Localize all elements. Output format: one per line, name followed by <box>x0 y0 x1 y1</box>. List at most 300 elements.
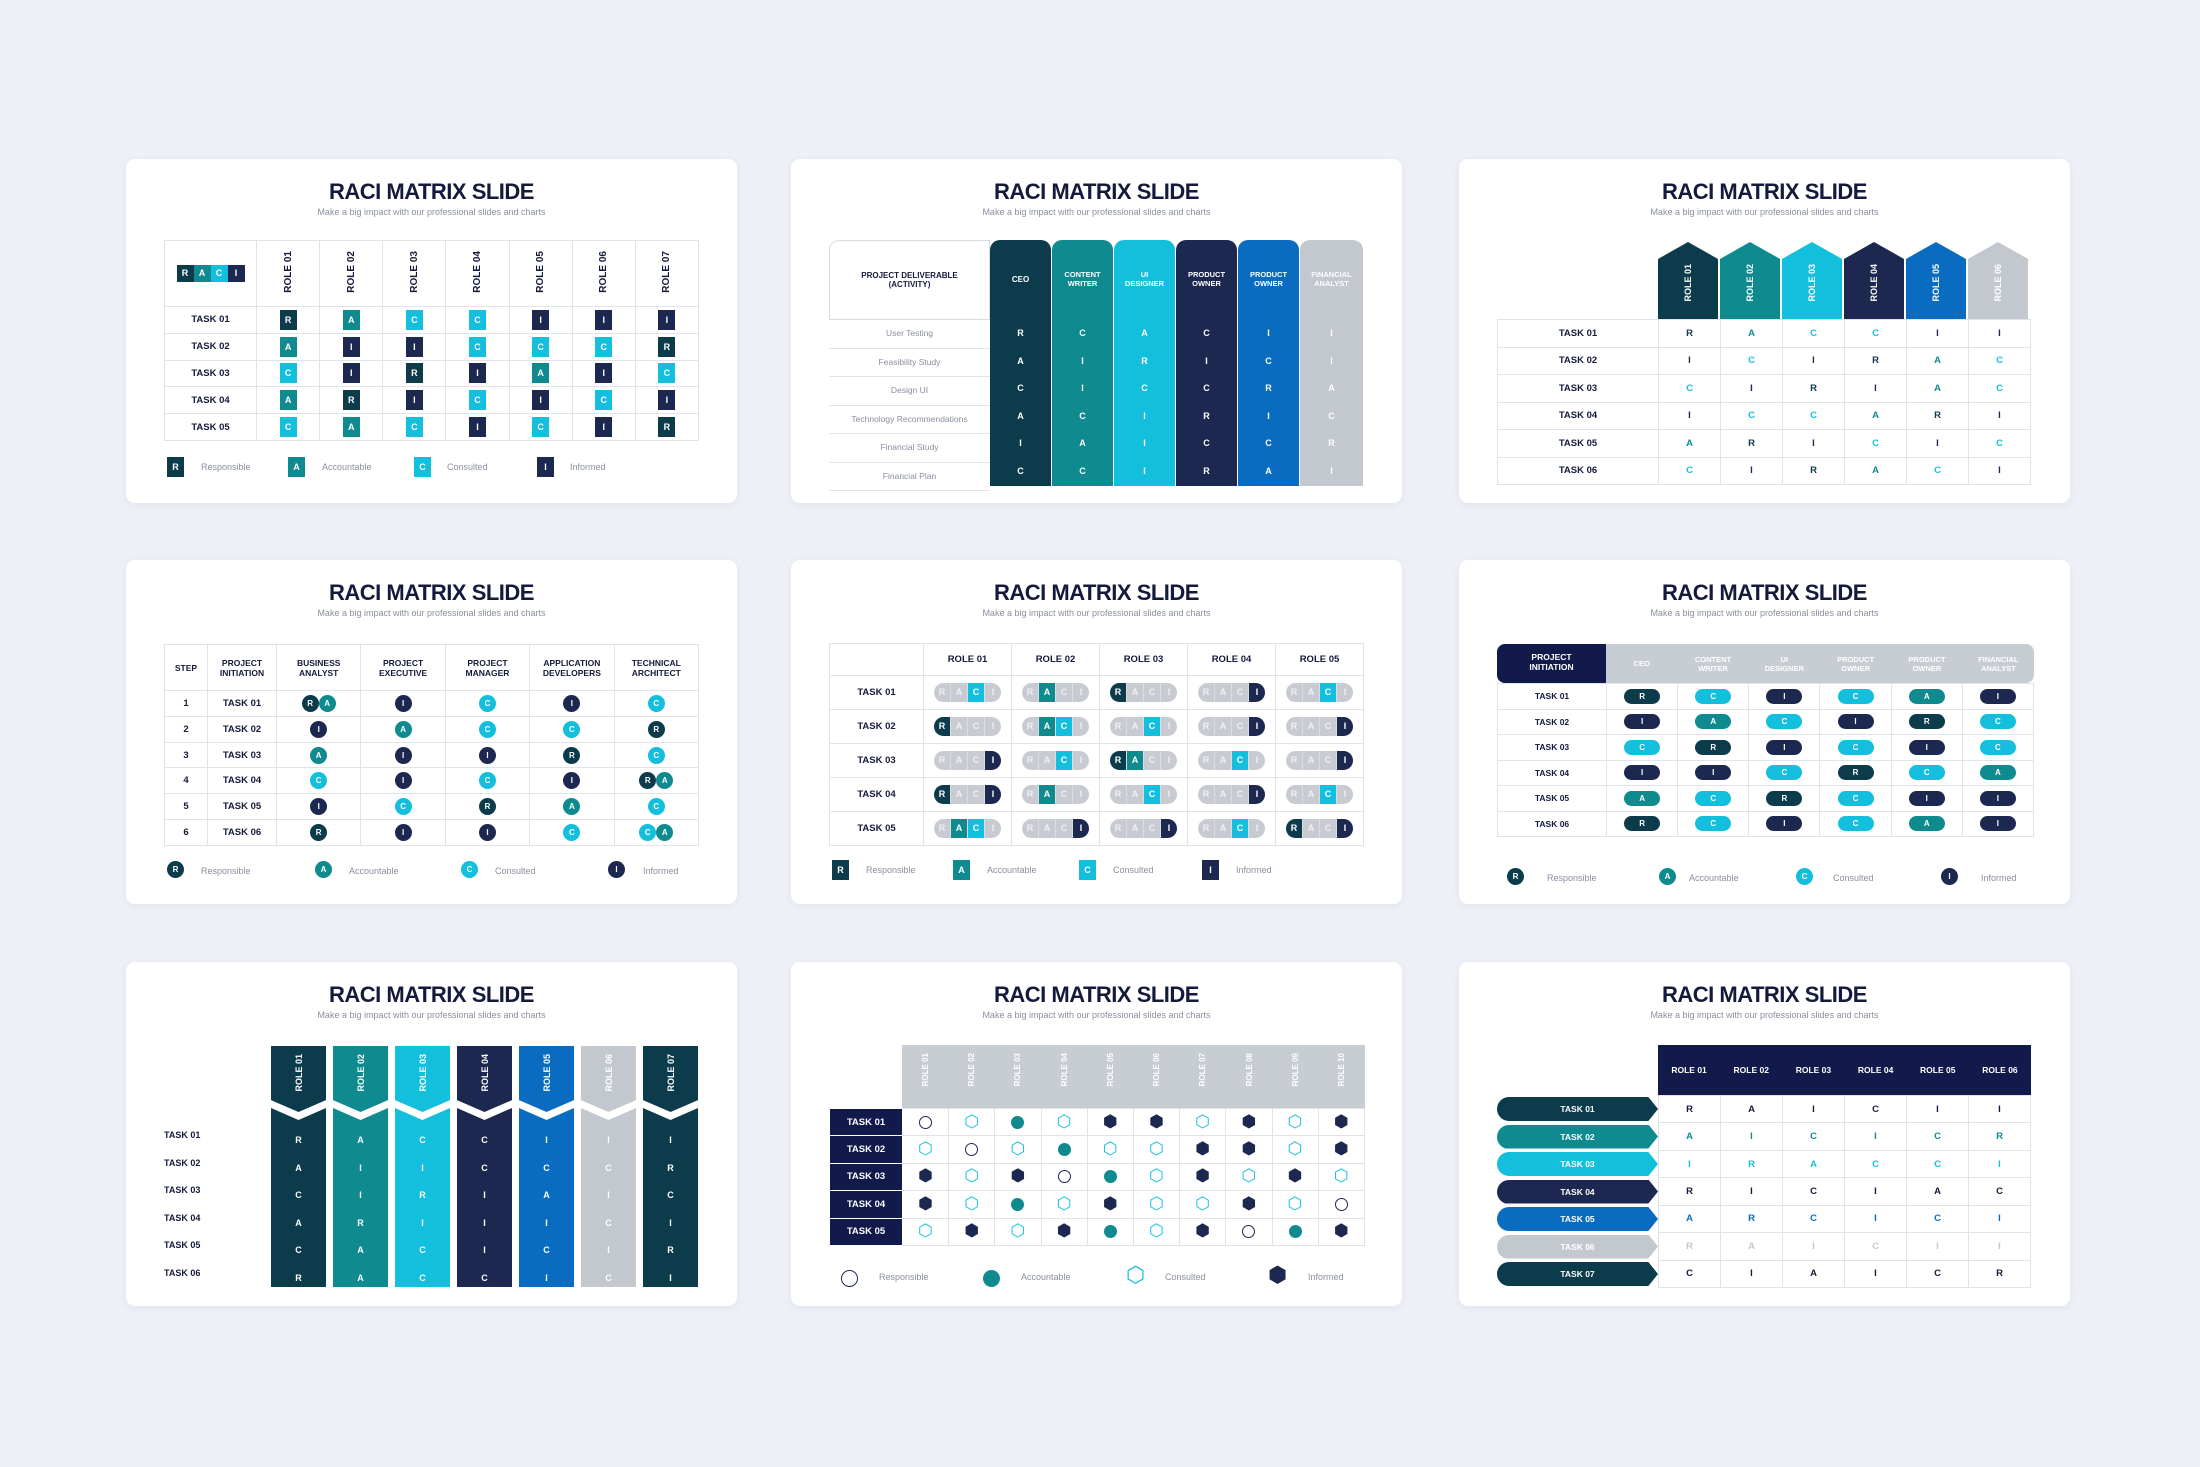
table: steps: 2 <box>183 724 189 735</box>
table: symbols: ⬢ <box>1288 1166 1303 1186</box>
legend: ⬡ <box>1126 1263 1145 1288</box>
table: pills: C <box>1853 743 1858 752</box>
table: pill matrix: A <box>1132 755 1138 765</box>
table: pill matrix: R <box>1291 721 1297 731</box>
role columns: I <box>421 1218 424 1228</box>
table: symbols: ⬢ <box>918 1166 933 1186</box>
legend <box>167 861 679 878</box>
role columns: R <box>295 1135 302 1145</box>
role columns: A <box>357 1245 364 1255</box>
role columns: A <box>1141 328 1148 338</box>
table: task/role matrix: ROLE 04 <box>472 251 483 293</box>
table: pill matrix: I <box>1344 823 1346 833</box>
table: pill matrix: ROLE 05 <box>1300 654 1339 665</box>
table: steps: C <box>653 751 659 760</box>
table: task/role matrix <box>164 240 699 441</box>
table: pill matrix: A <box>1220 721 1226 731</box>
legend: C <box>1084 865 1091 875</box>
role columns: C <box>1079 328 1086 338</box>
table: pill matrix: I <box>1256 687 1258 697</box>
table: symbols: ⬢ <box>1334 1112 1349 1132</box>
table: tasks: TASK 02 <box>1559 355 1597 366</box>
header bar: INITIATION <box>1529 662 1574 672</box>
legend: Responsible <box>201 866 251 876</box>
role columns: C <box>1017 383 1024 393</box>
task labels: TASK 05 <box>164 1240 200 1250</box>
table: steps: I <box>486 751 489 760</box>
role columns: R <box>1328 438 1335 448</box>
table: symbols: ⬢ <box>1103 1112 1118 1132</box>
table: letters: R <box>1686 1104 1693 1115</box>
header bar: OWNER <box>1841 664 1870 672</box>
header bar: ROLE 02 <box>1734 1065 1769 1075</box>
table: tasks: C <box>1996 355 2003 366</box>
table: tasks: A <box>1748 328 1755 339</box>
table: letters: I <box>1998 1159 2001 1170</box>
card 7: chevron columns <box>126 962 737 1306</box>
table: letters: A <box>1810 1268 1817 1279</box>
legend <box>167 457 606 477</box>
table: pill matrix: I <box>1256 789 1258 799</box>
header strip: ROLE 03 <box>1013 1053 1022 1086</box>
table: pill matrix: A <box>1220 789 1226 799</box>
table: pills: C <box>1710 692 1716 701</box>
table: letters: C <box>1934 1268 1941 1279</box>
header strip: ROLE 05 <box>1106 1053 1115 1086</box>
header strip: ROLE 06 <box>1152 1053 1161 1086</box>
table: steps: TASK 04 <box>223 775 261 786</box>
table: pill matrix: C <box>1237 721 1243 731</box>
table: pill matrix: I <box>992 721 994 731</box>
role columns: ROLE 05 <box>542 1054 552 1092</box>
table: pill matrix: C <box>1237 687 1243 697</box>
table: letters: C <box>1872 1159 1879 1170</box>
table: symbols: ⬡ <box>1288 1194 1303 1214</box>
table: letters: I <box>1874 1268 1877 1279</box>
table: symbols: ⬡ <box>1057 1112 1072 1132</box>
legend: Accountable <box>349 866 399 876</box>
table: tasks: R <box>1748 438 1755 449</box>
subtitle: Make a big impact with our professional slides and charts <box>1650 207 1879 217</box>
table: task/role matrix: A <box>199 268 205 278</box>
table: steps: 6 <box>183 827 189 838</box>
table: task/role matrix: R <box>664 422 670 432</box>
role columns: A <box>357 1272 364 1282</box>
table: pill matrix: I <box>1080 721 1082 731</box>
table: task/role matrix: C <box>474 395 481 405</box>
table: task/role matrix: C <box>537 422 544 432</box>
table: pill matrix: TASK 02 <box>857 721 896 732</box>
legend: Accountable <box>987 865 1037 875</box>
role columns: WRITER <box>1068 279 1097 288</box>
table: pill matrix: A <box>1132 823 1138 833</box>
table: pills: TASK 06 <box>1535 819 1569 829</box>
card 8: symbol matrix <box>791 962 1402 1306</box>
table: steps: TASK 01 <box>223 698 261 709</box>
table: letters: R <box>1686 1241 1693 1252</box>
table: pill matrix: C <box>1237 755 1243 765</box>
table: task/role matrix: ROLE 05 <box>535 251 546 293</box>
role columns: C <box>1203 328 1210 338</box>
table: pill matrix: I <box>1168 721 1170 731</box>
legend: A <box>321 865 326 874</box>
table: tasks: I <box>1812 438 1815 449</box>
table: symbols: TASK 03 <box>847 1171 885 1182</box>
role columns: FINANCIAL <box>1311 270 1352 279</box>
table: pill matrix: A <box>1132 789 1138 799</box>
table: pill matrix: C <box>1061 755 1067 765</box>
header strip: ROLE 09 <box>1291 1053 1300 1086</box>
role columns: R <box>295 1272 302 1282</box>
table: letters: C <box>1934 1213 1941 1224</box>
subtitle: Make a big impact with our professional slides and charts <box>982 1010 1211 1020</box>
table: tasks: I <box>1812 355 1815 366</box>
table: pill matrix: A <box>1220 755 1226 765</box>
table: steps: 3 <box>183 750 189 761</box>
legend <box>832 860 1272 880</box>
table: steps: C <box>569 725 575 734</box>
table: symbols: ⬡ <box>1103 1139 1118 1159</box>
table: tasks: R <box>1872 355 1879 366</box>
role columns: I <box>669 1135 672 1145</box>
task arrows: TASK 02 <box>1560 1132 1595 1142</box>
table: pill matrix: C <box>1061 721 1067 731</box>
table: steps: MANAGER <box>466 668 509 678</box>
table: pill matrix: I <box>1080 755 1082 765</box>
table: steps: C <box>316 776 322 785</box>
table: pill matrix: I <box>1080 789 1082 799</box>
table: pills: A <box>1995 768 2001 777</box>
table: steps: 1 <box>183 698 189 709</box>
table: symbols: ⬢ <box>1011 1166 1025 1186</box>
table: letters: I <box>1874 1186 1877 1197</box>
role columns: ROLE 06 <box>604 1054 614 1092</box>
table: pill matrix: R <box>1027 687 1033 697</box>
table: letters: C <box>1934 1159 1941 1170</box>
table: pill matrix: I <box>1256 721 1258 731</box>
table: steps <box>164 644 699 846</box>
table: letters: C <box>1686 1268 1693 1279</box>
legend: Consulted <box>1113 865 1154 875</box>
role columns: I <box>545 1135 548 1145</box>
legend: C <box>419 462 426 472</box>
table: pill matrix: C <box>973 789 979 799</box>
table: letters: R <box>1996 1268 2003 1279</box>
table: task/role matrix: C <box>216 268 222 278</box>
role columns: A <box>1328 383 1335 393</box>
role columns: I <box>1143 466 1146 476</box>
table: tasks: R <box>1934 410 1941 421</box>
table: task/role matrix: R <box>348 395 354 405</box>
role columns: C <box>481 1135 488 1145</box>
table: letters: A <box>1748 1104 1755 1115</box>
table: steps: R <box>307 699 313 708</box>
table: letters: I <box>1688 1159 1691 1170</box>
table: symbols: TASK 01 <box>847 1117 885 1128</box>
table: task/role matrix: A <box>348 315 354 325</box>
role columns: A <box>1017 356 1024 366</box>
role columns: R <box>667 1245 674 1255</box>
table: task/role matrix: I <box>476 422 479 432</box>
role columns: R <box>1017 328 1024 338</box>
table: symbols: TASK 05 <box>847 1226 885 1237</box>
role columns: C <box>605 1218 612 1228</box>
table: steps: C <box>569 828 575 837</box>
header strip <box>902 1045 1365 1108</box>
task arrows: TASK 06 <box>1560 1242 1595 1252</box>
subtitle: Make a big impact with our professional slides and charts <box>317 608 546 618</box>
role headers: ROLE 04 <box>1869 264 1879 302</box>
table: letters: I <box>1874 1213 1877 1224</box>
legend: Consulted <box>1833 873 1874 883</box>
table: letters: C <box>1872 1104 1879 1115</box>
table: pills: R <box>1853 768 1858 777</box>
table: pill matrix: R <box>1291 687 1297 697</box>
table: pills: TASK 03 <box>1535 742 1569 752</box>
title: RACI MATRIX SLIDE <box>1662 982 1867 1007</box>
table: symbols: ⬢ <box>1241 1194 1256 1214</box>
table: pill matrix: R <box>939 687 945 697</box>
title: RACI MATRIX SLIDE <box>1662 580 1867 605</box>
table: letters: I <box>1998 1213 2001 1224</box>
table: task/role matrix: C <box>285 422 291 432</box>
table: letters: C <box>1810 1131 1817 1142</box>
table: pill matrix: C <box>1061 687 1067 697</box>
subtitle: Make a big impact with our professional slides and charts <box>317 207 546 217</box>
legend: Consulted <box>495 866 536 876</box>
table: pills: C <box>1710 794 1716 803</box>
table: pill matrix: A <box>1044 721 1050 731</box>
table: tasks: A <box>1686 438 1693 449</box>
table: pills <box>1497 683 2034 837</box>
table: pill matrix: R <box>939 721 945 731</box>
table: letters: C <box>1934 1131 1941 1142</box>
legend: I <box>1948 872 1951 881</box>
table: pill matrix: R <box>1203 721 1209 731</box>
role columns: R <box>357 1218 364 1228</box>
role headers: ROLE 05 <box>1931 264 1941 302</box>
table: letters: I <box>1874 1131 1877 1142</box>
role columns: C <box>481 1162 488 1172</box>
role columns: ROLE 04 <box>480 1054 490 1092</box>
table: pill matrix: R <box>939 789 945 799</box>
table: letters <box>1658 1095 2031 1288</box>
legend: R <box>172 462 179 472</box>
table: tasks: A <box>1872 465 1879 476</box>
table: symbols: ⬢ <box>918 1194 933 1214</box>
table: symbols: ⬡ <box>1149 1139 1164 1159</box>
table: pill matrix: R <box>939 755 945 765</box>
role columns: I <box>483 1218 486 1228</box>
table: pills: I <box>1641 768 1643 777</box>
table: tasks: I <box>1998 328 2001 339</box>
table: task/role matrix: C <box>601 395 607 405</box>
table: steps: PROJECT <box>222 658 262 668</box>
task labels <box>164 1130 200 1278</box>
legend: C <box>1802 872 1807 881</box>
header bar: CEO <box>1634 659 1650 668</box>
legend: Consulted <box>1165 1272 1206 1282</box>
header bar <box>1497 644 2034 683</box>
role columns: A <box>1017 410 1024 420</box>
table: steps: R <box>653 725 659 734</box>
table: task/role matrix: C <box>537 342 544 352</box>
role columns: C <box>481 1272 488 1282</box>
table: symbols: ⬢ <box>1057 1221 1072 1241</box>
table: letters: I <box>1750 1268 1753 1279</box>
table: pill matrix: A <box>1308 721 1314 731</box>
header strip: ROLE 08 <box>1245 1053 1254 1086</box>
task labels: TASK 06 <box>164 1268 200 1278</box>
role columns: I <box>483 1190 486 1200</box>
table: task/role matrix: A <box>348 422 354 432</box>
role columns: PRODUCT <box>1188 270 1225 279</box>
table: task/role matrix: R <box>285 315 291 325</box>
table: steps: DEVELOPERS <box>543 668 601 678</box>
table: tasks: C <box>1996 438 2003 449</box>
legend: A <box>1665 872 1670 881</box>
table: pills: I <box>1854 717 1857 726</box>
table: symbols: ⬡ <box>964 1194 979 1214</box>
table: tasks: C <box>1872 438 1879 449</box>
role columns: R <box>1141 356 1148 366</box>
table: letters: I <box>1998 1241 2001 1252</box>
table: steps: R <box>645 776 651 785</box>
table: tasks: TASK 03 <box>1559 383 1597 394</box>
table: symbols: ⬢ <box>1103 1194 1118 1214</box>
role columns: I <box>607 1190 610 1200</box>
table: steps: C <box>653 699 659 708</box>
table: pill matrix: C <box>1061 823 1067 833</box>
legend: ⬢ <box>1268 1263 1287 1288</box>
table: pill matrix: I <box>1344 755 1346 765</box>
role columns <box>271 1046 698 1287</box>
table: symbols: ⬢ <box>964 1221 979 1241</box>
role columns: I <box>1205 356 1208 366</box>
role columns: C <box>1141 383 1148 393</box>
table: task/role matrix: I <box>666 315 668 325</box>
subtitle: Make a big impact with our professional slides and charts <box>317 1010 546 1020</box>
table: pill matrix: TASK 05 <box>857 823 896 834</box>
header strip: ROLE 02 <box>967 1053 976 1086</box>
role columns: C <box>1265 356 1272 366</box>
table: steps: I <box>402 751 404 760</box>
deliverable column: Financial Study <box>880 442 939 452</box>
role headers: ROLE 02 <box>1745 264 1755 302</box>
table: pills: C <box>1853 692 1858 701</box>
table: letters: I <box>1750 1131 1753 1142</box>
role columns: I <box>607 1135 610 1145</box>
role columns: C <box>1079 466 1086 476</box>
table: pill matrix: TASK 03 <box>857 755 896 766</box>
table: pill matrix: C <box>1061 789 1067 799</box>
table: task/role matrix: I <box>476 368 479 378</box>
table: pill matrix: R <box>1027 755 1033 765</box>
table: symbols: ⬡ <box>1334 1166 1349 1186</box>
table: letters: A <box>1810 1159 1817 1170</box>
table: pills: I <box>1783 692 1786 701</box>
task arrows <box>1497 1097 1658 1286</box>
table: tasks: C <box>1748 410 1755 421</box>
table: letters: I <box>1812 1104 1815 1115</box>
table: pill matrix: A <box>1308 823 1314 833</box>
table: tasks: C <box>1934 465 1941 476</box>
role columns: A <box>543 1190 550 1200</box>
table: tasks: TASK 01 <box>1559 328 1597 339</box>
table: pills: R <box>1924 717 1930 726</box>
table: task/role matrix: C <box>285 368 291 378</box>
table: steps: C <box>645 828 651 837</box>
legend: A <box>293 462 300 472</box>
table: task/role matrix: ROLE 07 <box>661 251 672 293</box>
role columns: ROLE 02 <box>356 1054 366 1092</box>
table: steps: A <box>569 802 575 811</box>
table: symbols: ⬡ <box>1288 1112 1303 1132</box>
table: tasks: TASK 04 <box>1559 410 1597 421</box>
table: pill matrix: A <box>1308 789 1314 799</box>
table: pill matrix: A <box>1308 687 1314 697</box>
table: task/role matrix: ROLE 02 <box>346 251 357 293</box>
table: task/role matrix: A <box>537 368 544 378</box>
table: steps: I <box>486 828 489 837</box>
table: tasks: TASK 06 <box>1559 465 1597 476</box>
header bar: ROLE 01 <box>1671 1065 1707 1075</box>
table: pill matrix: C <box>973 687 979 697</box>
table: task/role matrix: I <box>602 422 605 432</box>
subtitle: Make a big impact with our professional slides and charts <box>982 608 1211 618</box>
table: pill matrix: R <box>1115 755 1121 765</box>
table: pill matrix: A <box>1044 687 1050 697</box>
deliverable column: User Testing <box>886 328 933 338</box>
table: steps: I <box>402 699 404 708</box>
table: tasks: A <box>1934 355 1941 366</box>
table: pill matrix: A <box>956 789 962 799</box>
table: pill matrix: I <box>1168 789 1170 799</box>
table: pill matrix: C <box>973 755 979 765</box>
table: pills: I <box>1997 692 1999 701</box>
table: task/role matrix: C <box>411 422 418 432</box>
role columns: I <box>545 1272 548 1282</box>
table: steps: A <box>324 699 330 708</box>
table: pill matrix: I <box>1344 789 1346 799</box>
table: pill matrix: A <box>1220 823 1226 833</box>
role columns: A <box>295 1162 302 1172</box>
table: task/role matrix: I <box>539 395 542 405</box>
table: tasks: I <box>1750 383 1753 394</box>
table: steps: I <box>571 699 573 708</box>
table: pills: A <box>1710 717 1716 726</box>
table: pill matrix: ROLE 03 <box>1124 654 1163 665</box>
table: pills: TASK 04 <box>1535 768 1569 778</box>
table: task/role matrix: C <box>664 368 670 378</box>
legend: Informed <box>1236 865 1272 875</box>
table: symbols: ⬡ <box>1288 1139 1303 1159</box>
table: letters: C <box>1810 1213 1817 1224</box>
table: pills: TASK 02 <box>1535 717 1569 727</box>
table: pills: I <box>1997 794 1999 803</box>
legend: Responsible <box>879 1272 929 1282</box>
table: task/role matrix: I <box>350 368 352 378</box>
role columns: C <box>419 1135 426 1145</box>
table: steps: I <box>318 802 320 811</box>
table: pill matrix: ROLE 04 <box>1212 654 1251 665</box>
table: pills: C <box>1782 768 1787 777</box>
table: steps: A <box>400 725 406 734</box>
table: steps: I <box>318 725 320 734</box>
table: letters: C <box>1872 1241 1879 1252</box>
table: pill matrix: R <box>1115 721 1121 731</box>
card 2: deliverables with colored role columns <box>791 159 1402 503</box>
